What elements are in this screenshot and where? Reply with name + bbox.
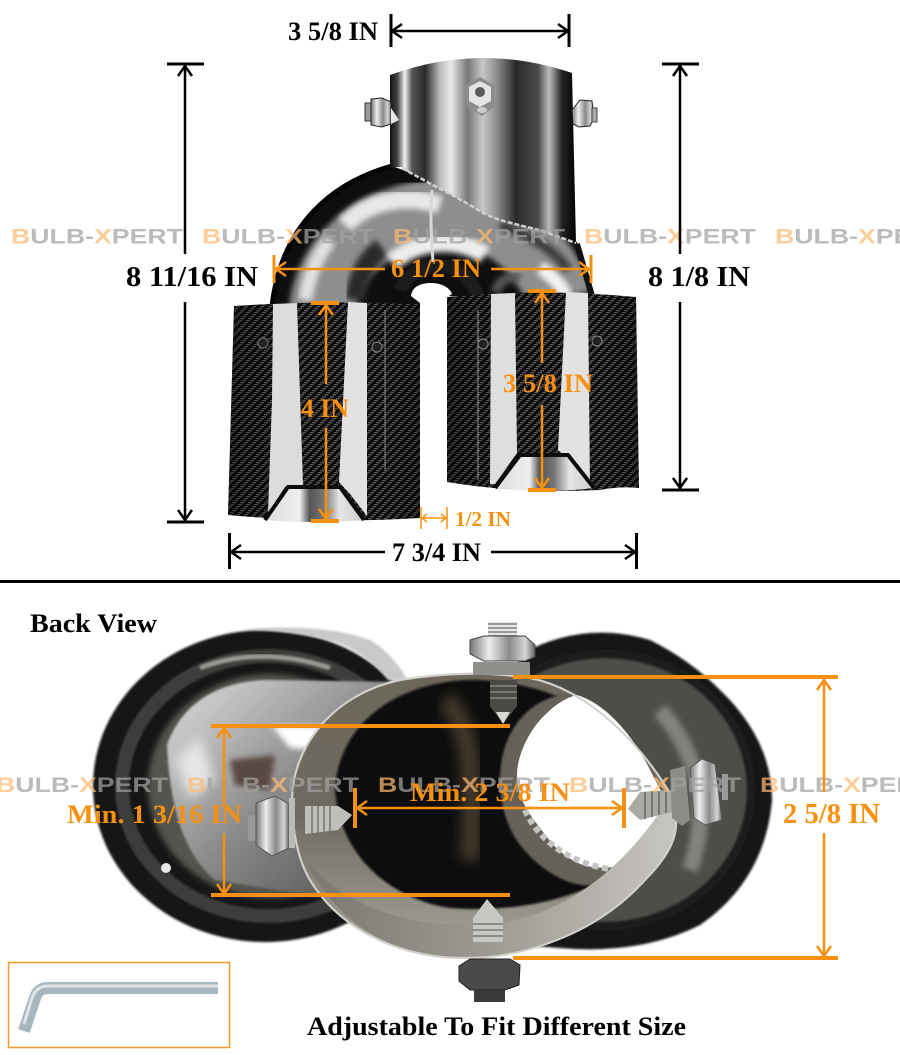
dimension: height right 8 1/8 IN [648,64,750,490]
photo: top pipe [365,58,597,243]
inner ring around hole [500,693,668,886]
watermark row 1: BULB- XPERT [584,226,756,248]
hole between legs [411,283,452,306]
weld seam [431,190,433,262]
dimension: overall height left 8 11/16 IN [126,64,258,522]
inner dark throat [335,680,620,909]
silver pipe [167,680,405,897]
right nut [572,100,597,127]
dimension: bottom width 7 3/4 IN: 7 3/4 IN [392,538,481,567]
see-through hole [517,695,667,868]
dimension: orange 3 5/8 IN: 3 5/8 IN [503,369,593,398]
photo: bottom clamp bolt [459,899,520,1002]
left nut [365,98,399,127]
dimension: orange 6 1/2 IN: 6 1/2 IN [391,254,481,283]
photo: right clamp bolt [628,759,728,826]
dimension: top width 3 5/8 IN: 3 5/8 IN [288,17,378,46]
centre bolt [465,77,495,116]
watermark row 1: BULB- XPERT [202,226,374,248]
dimension: orange 1/2 IN gap: 1/2 IN [455,507,511,531]
dimension: orange Min. 2 3/8 IN [355,778,624,828]
dimension: orange 4 IN [301,303,349,521]
dimension: height right 8 1/8 IN: 8 1/8 IN [648,261,750,293]
photo: main oval exhaust opening [292,674,676,958]
photo: left clamp bolt [248,796,352,856]
dimension: orange Min. 2 3/8 IN: Min. 2 3/8 IN [410,778,570,807]
stripes [490,293,517,484]
photo: back view right ring [450,633,772,949]
dimension: overall height left 8 11/16 IN: 8 11/16 IN [126,261,258,293]
lower rim crescent [305,800,676,958]
dimension: orange Min. 1 3/16 IN: Min. 1 3/16 IN [67,800,242,829]
dimension: orange 2 5/8 IN [513,677,880,958]
watermark row 2: BULB- XPERT [378,774,550,797]
photo: back view left ring [93,628,437,942]
photo: top clamp bolt [470,624,535,724]
notch [265,487,364,522]
divider [0,580,900,583]
watermark row 1 [11,226,900,248]
watermark row 2 [0,774,900,797]
photo: Y-pipe and bend [272,166,592,310]
dimension: orange 1/2 IN gap [421,507,511,531]
watermark row 2: BULB- XPERT [0,774,168,797]
watermark row 1: BULB- XPERT [11,226,183,248]
dimension: bottom width 7 3/4 IN [230,533,636,569]
watermark row 2: BULB- XPERT [569,774,741,797]
dimension: orange 6 1/2 IN [274,254,591,283]
watermark row 1: BULB- XPERT [393,226,565,248]
dimension: orange 3 5/8 IN [503,291,593,490]
stripes [268,303,303,513]
dimension: orange Min. 1 3/16 IN [67,726,510,895]
photo: right carbon tip [447,292,639,491]
inset: allen key [8,962,230,1048]
caption: Adjustable To Fit Different Size [307,1012,686,1041]
dimension: top width 3 5/8 IN [288,14,569,47]
heading: Back View: Back View [30,609,157,638]
notch [495,455,594,491]
photo: left carbon tip [228,302,420,522]
dimension: orange 2 5/8 IN: 2 5/8 IN [783,799,880,830]
dimension: orange 4 IN: 4 IN [301,394,349,423]
watermark row 2: BULB- XPERT [187,774,359,797]
